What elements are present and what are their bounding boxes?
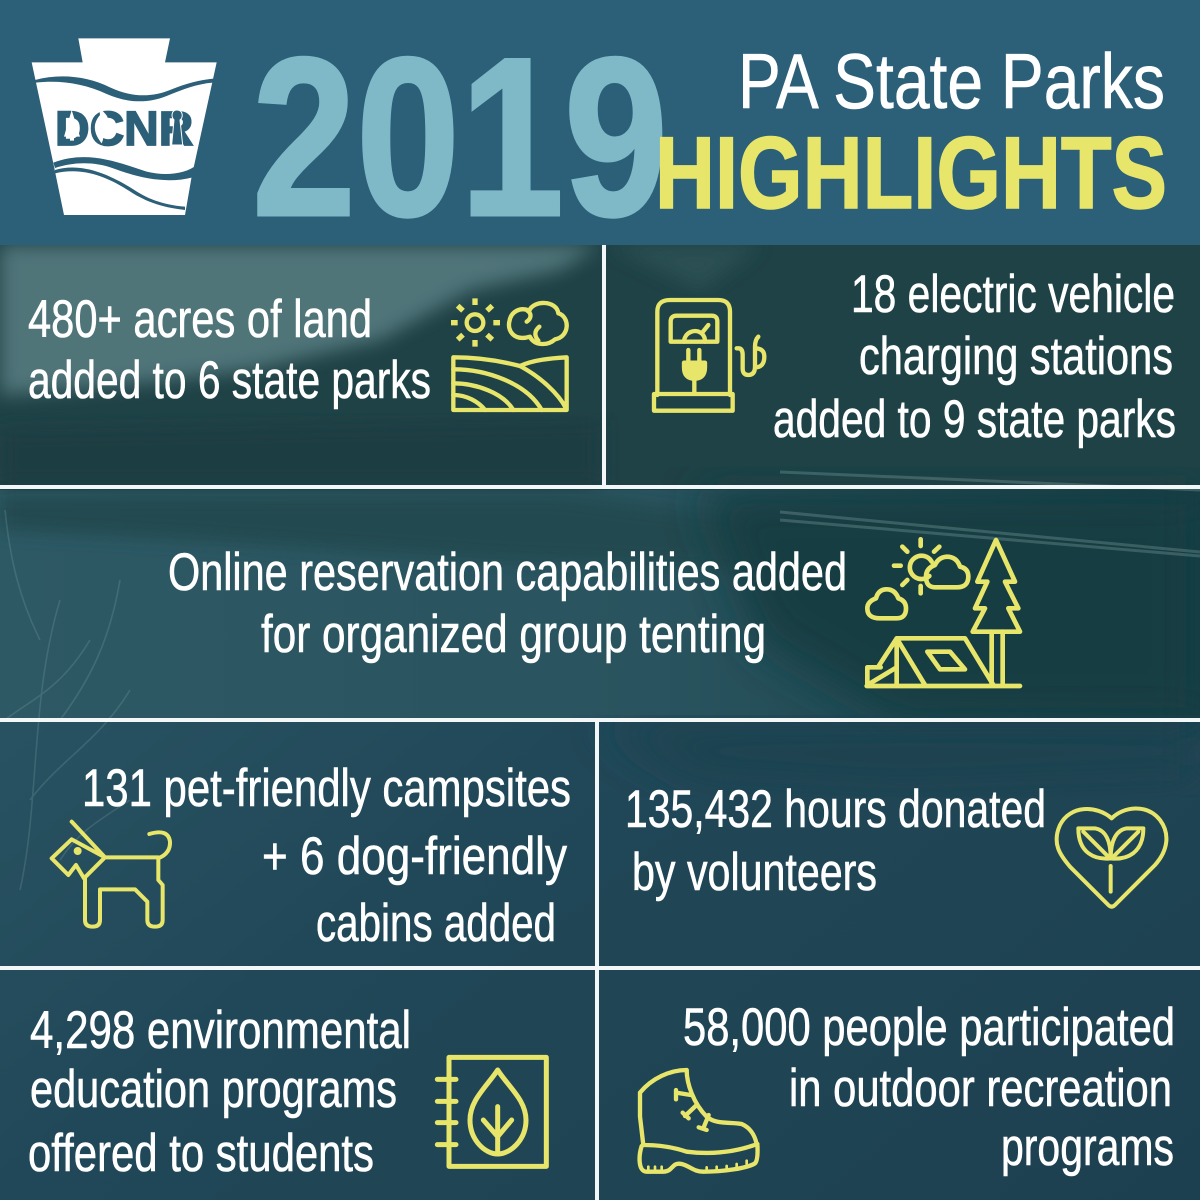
- icon: dog: [52, 822, 170, 927]
- text: online reservations: for organized group tenting: [261, 605, 766, 664]
- icon: hiking boot: [640, 1070, 758, 1172]
- logo: DCNR keystone: DCNR: [55, 102, 193, 156]
- text: online reservations: [168, 543, 847, 664]
- text: environmental education: [28, 1001, 411, 1183]
- panel: land acres: [28, 290, 567, 410]
- text: environmental education: education programs: [30, 1060, 397, 1119]
- title: 2019: 2019: [252, 10, 668, 263]
- text: EV charging: [773, 265, 1176, 449]
- icon: notebook with leaf: [437, 1057, 546, 1166]
- panel: volunteers: [625, 780, 1166, 907]
- panel dividers: [0, 245, 1200, 1200]
- icon: heart with sprout: [1057, 809, 1166, 907]
- text: land acres: 480+ acres of land: [28, 290, 372, 349]
- panel: outdoor recreation: [640, 998, 1175, 1177]
- text: volunteers: by volunteers: [632, 843, 877, 902]
- icon: tent, tree and clouds: [867, 539, 1020, 686]
- panel: environmental education: [28, 1001, 546, 1183]
- text: pet-friendly: [82, 759, 571, 953]
- text: volunteers: 135,432 hours donated: [625, 780, 1046, 839]
- text: pet-friendly: + 6 dog-friendly: [262, 827, 567, 886]
- text: pet-friendly: cabins added: [316, 894, 556, 953]
- background: lake photo: [0, 245, 1200, 1200]
- text: land acres: [28, 290, 431, 410]
- text: outdoor recreation: [683, 998, 1175, 1177]
- text: land acres: added to 6 state parks: [28, 351, 431, 410]
- logo: DCNR keystone: [32, 38, 217, 215]
- icon: sun, cloud and fields: [451, 298, 567, 410]
- panel: pet-friendly: [52, 759, 571, 953]
- panel: EV charging: [654, 265, 1176, 449]
- text: online reservations: Online reservation capabilities added: [168, 543, 847, 602]
- icon: EV charger: [654, 300, 764, 411]
- text: pet-friendly: 131 pet-friendly campsites: [82, 759, 571, 818]
- header band: [0, 0, 1200, 245]
- text: volunteers: [625, 780, 1046, 902]
- panel: online reservations: [168, 539, 1020, 686]
- text: environmental education: offered to students: [28, 1124, 374, 1183]
- text: environmental education: 4,298 environmental: [30, 1001, 411, 1060]
